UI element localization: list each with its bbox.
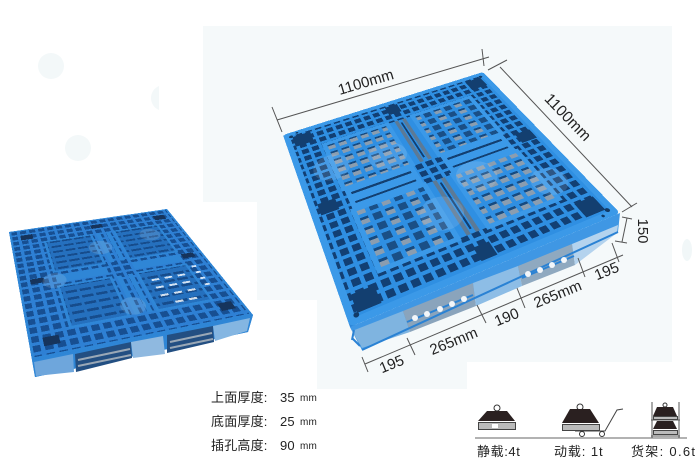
icon: dynamic load on cart [562,404,623,436]
background faint dot right [682,239,692,261]
dimension label: 195 right: 195 [592,259,622,284]
dimension label: 190: 190 [492,305,522,330]
central cross [324,97,559,270]
background tint lower extension [317,362,467,389]
spec: insertion height [211,438,317,453]
label: static load: 静载:4t [477,444,520,459]
dimension label: height 150: 150 [634,218,651,244]
label: dynamic load: 动载: 1t [554,444,603,459]
watermark [309,100,576,275]
bolt holes [288,74,613,322]
spec: insertion height: 插孔高度: [211,438,268,453]
corner openings [292,78,605,313]
small pallet front side [9,209,253,377]
background tint panel [203,26,672,362]
edge rim [286,74,616,323]
label: rack load: 货架: 0.6t [631,444,696,459]
background white patch left [0,202,257,459]
spec: top thickness: 上面厚度: [211,390,268,405]
load icons [475,402,687,438]
large pallet top deck [284,72,618,326]
icon: rack load [651,402,680,438]
mesh panels [324,97,559,270]
small pallet top deck [9,209,253,358]
dimension label: top 1100mm: 1100mm [336,66,396,99]
spec: top thickness: mm [300,393,317,404]
large pallet photo [283,72,620,351]
spec: insertion height: 90 [280,438,295,453]
spec: bottom thickness: 底面厚度: [211,414,268,429]
large pallet sides [283,135,620,351]
icon: static load [478,405,516,430]
background white patch lower left [257,300,317,459]
spec: bottom thickness [211,414,317,429]
spec: bottom thickness: mm [300,417,317,428]
spec: bottom thickness: 25 [280,414,295,429]
spec: top thickness [211,390,317,405]
deck base and edge mesh [283,72,620,327]
ground line [475,437,687,439]
dimension label: 195 left: 195 [377,352,407,377]
dimension label: 265mm left: 265mm [427,324,480,359]
dimension label: 265mm right: 265mm [531,277,584,312]
small pallet photo [9,209,253,377]
spec: top thickness: 35 [280,390,295,405]
background faint dots [38,53,159,161]
dimension label: right 1100mm: 1100mm [541,90,594,145]
spec: insertion height: mm [300,441,317,452]
